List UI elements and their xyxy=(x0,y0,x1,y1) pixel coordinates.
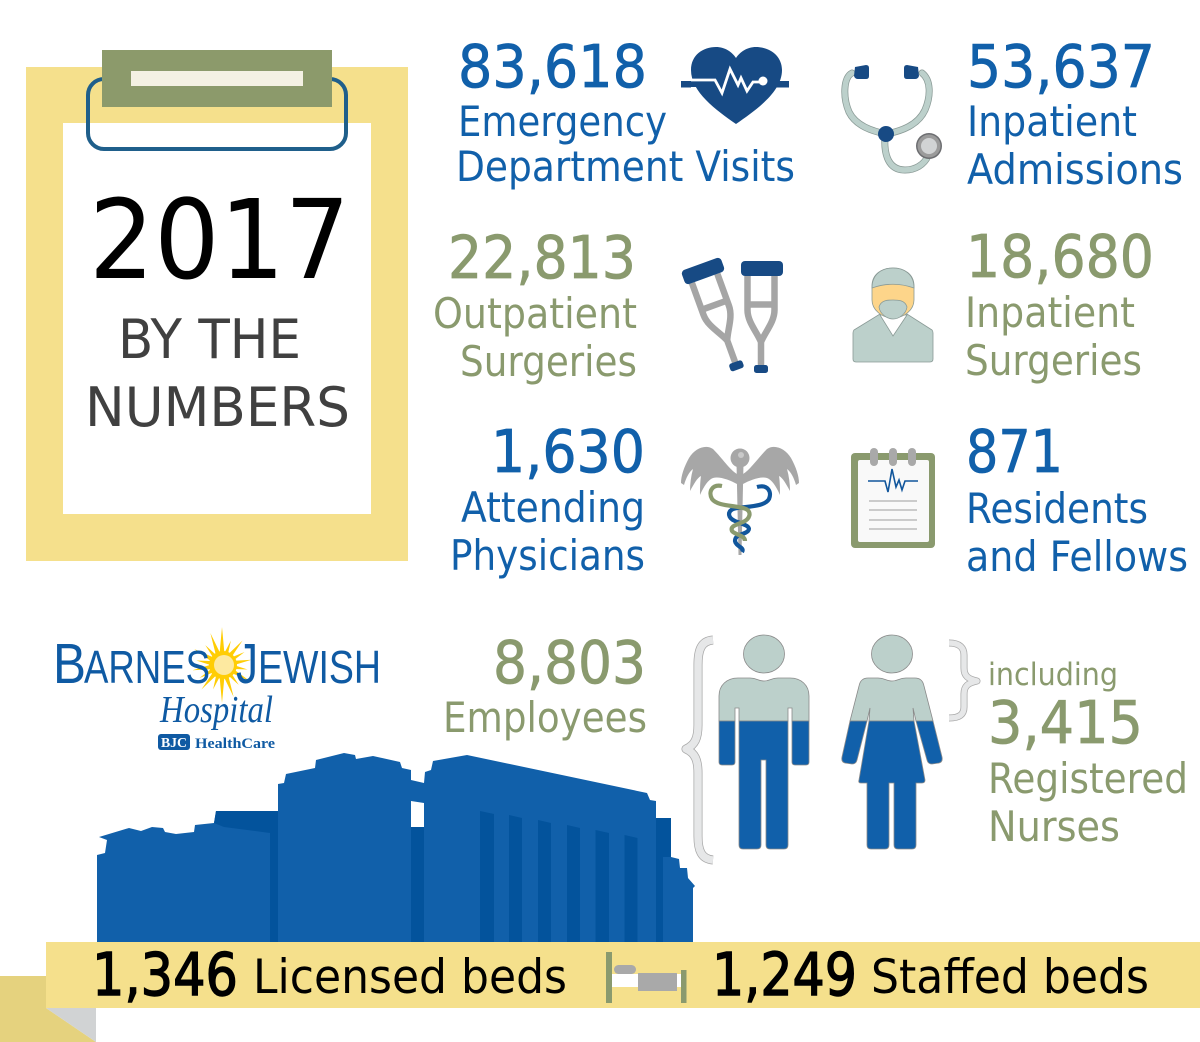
stat: residents and fellows xyxy=(966,417,1188,581)
stat: inpatient surgeries xyxy=(965,222,1154,385)
licensed beds xyxy=(92,940,567,1009)
stat: emergency department visits: Department Visits xyxy=(456,142,795,191)
icon: female figure xyxy=(842,635,942,849)
logo: Barnes-Jewish Hospital: J xyxy=(236,632,258,696)
stat: registered nurses xyxy=(988,657,1188,851)
stat: inpatient surgeries: Inpatient xyxy=(965,288,1135,337)
logo: Barnes-Jewish Hospital: ARNES xyxy=(84,641,210,693)
title: by the numbers xyxy=(85,308,350,439)
icon: medical clipboard xyxy=(851,448,935,548)
illustration: hospital building xyxy=(97,753,695,942)
logo: Barnes-Jewish Hospital xyxy=(53,627,381,752)
icon: surgeon xyxy=(853,268,933,362)
stat: emergency department visits xyxy=(456,32,795,191)
stat: outpatient surgeries xyxy=(433,223,637,386)
stat: attending physicians: Attending xyxy=(461,483,645,532)
stat: inpatient admissions: Inpatient xyxy=(967,97,1137,146)
stat: registered nurses: 3,415 xyxy=(988,688,1143,757)
stat: registered nurses: including xyxy=(988,657,1118,693)
logo: Barnes-Jewish Hospital: BJC xyxy=(161,736,187,751)
stat: inpatient admissions: Admissions xyxy=(967,145,1183,194)
staffed beds xyxy=(712,940,1149,1009)
logo: Barnes-Jewish Hospital: Hospital xyxy=(159,689,273,731)
icon: bed xyxy=(606,952,686,1003)
stat: employees xyxy=(443,628,647,742)
title: by the numbers: BY THE xyxy=(118,308,301,371)
stat: emergency department visits: 83,618 xyxy=(458,32,647,101)
stat: inpatient surgeries: Surgeries xyxy=(965,336,1142,385)
stat: employees: 8,803 xyxy=(493,628,646,697)
panel: clipboard title xyxy=(26,50,408,561)
staffed beds: 1,249 xyxy=(712,940,857,1009)
stat: attending physicians xyxy=(450,417,645,580)
logo: Barnes-Jewish Hospital: B xyxy=(53,632,86,696)
stat: attending physicians: 1,630 xyxy=(491,417,645,486)
licensed beds: Licensed beds xyxy=(253,950,567,1005)
icon: heart with pulse xyxy=(681,47,789,124)
logo: Barnes-Jewish Hospital: HealthCare xyxy=(195,736,275,752)
brace: employees xyxy=(686,640,713,860)
stat: inpatient admissions xyxy=(967,32,1183,194)
stat: outpatient surgeries: 22,813 xyxy=(448,223,636,292)
stat: inpatient admissions: 53,637 xyxy=(967,32,1155,101)
icon: male figure xyxy=(719,635,809,849)
stat: inpatient surgeries: 18,680 xyxy=(966,222,1154,291)
staffed beds: Staffed beds xyxy=(871,950,1149,1005)
stat: residents and fellows: 871 xyxy=(966,417,1063,486)
stat: outpatient surgeries: Outpatient xyxy=(433,289,637,338)
icon: caduceus xyxy=(681,447,799,555)
stat: attending physicians: Physicians xyxy=(450,531,645,580)
stat: residents and fellows: Residents xyxy=(966,484,1148,533)
title: year: 2017 xyxy=(89,176,350,304)
title: by the numbers: NUMBERS xyxy=(85,376,350,439)
stat: emergency department visits: Emergency xyxy=(458,97,667,146)
licensed beds: 1,346 xyxy=(92,940,238,1009)
stat: employees: Employees xyxy=(443,693,647,742)
stat: registered nurses: Nurses xyxy=(988,802,1120,851)
logo: Barnes-Jewish Hospital: EWISH xyxy=(258,641,381,693)
brace: nurses xyxy=(949,643,977,718)
stat: outpatient surgeries: Surgeries xyxy=(460,337,637,386)
icon: crutches xyxy=(681,257,783,376)
banner: bed counts xyxy=(0,940,1200,1042)
icon: stethoscope xyxy=(845,65,942,170)
